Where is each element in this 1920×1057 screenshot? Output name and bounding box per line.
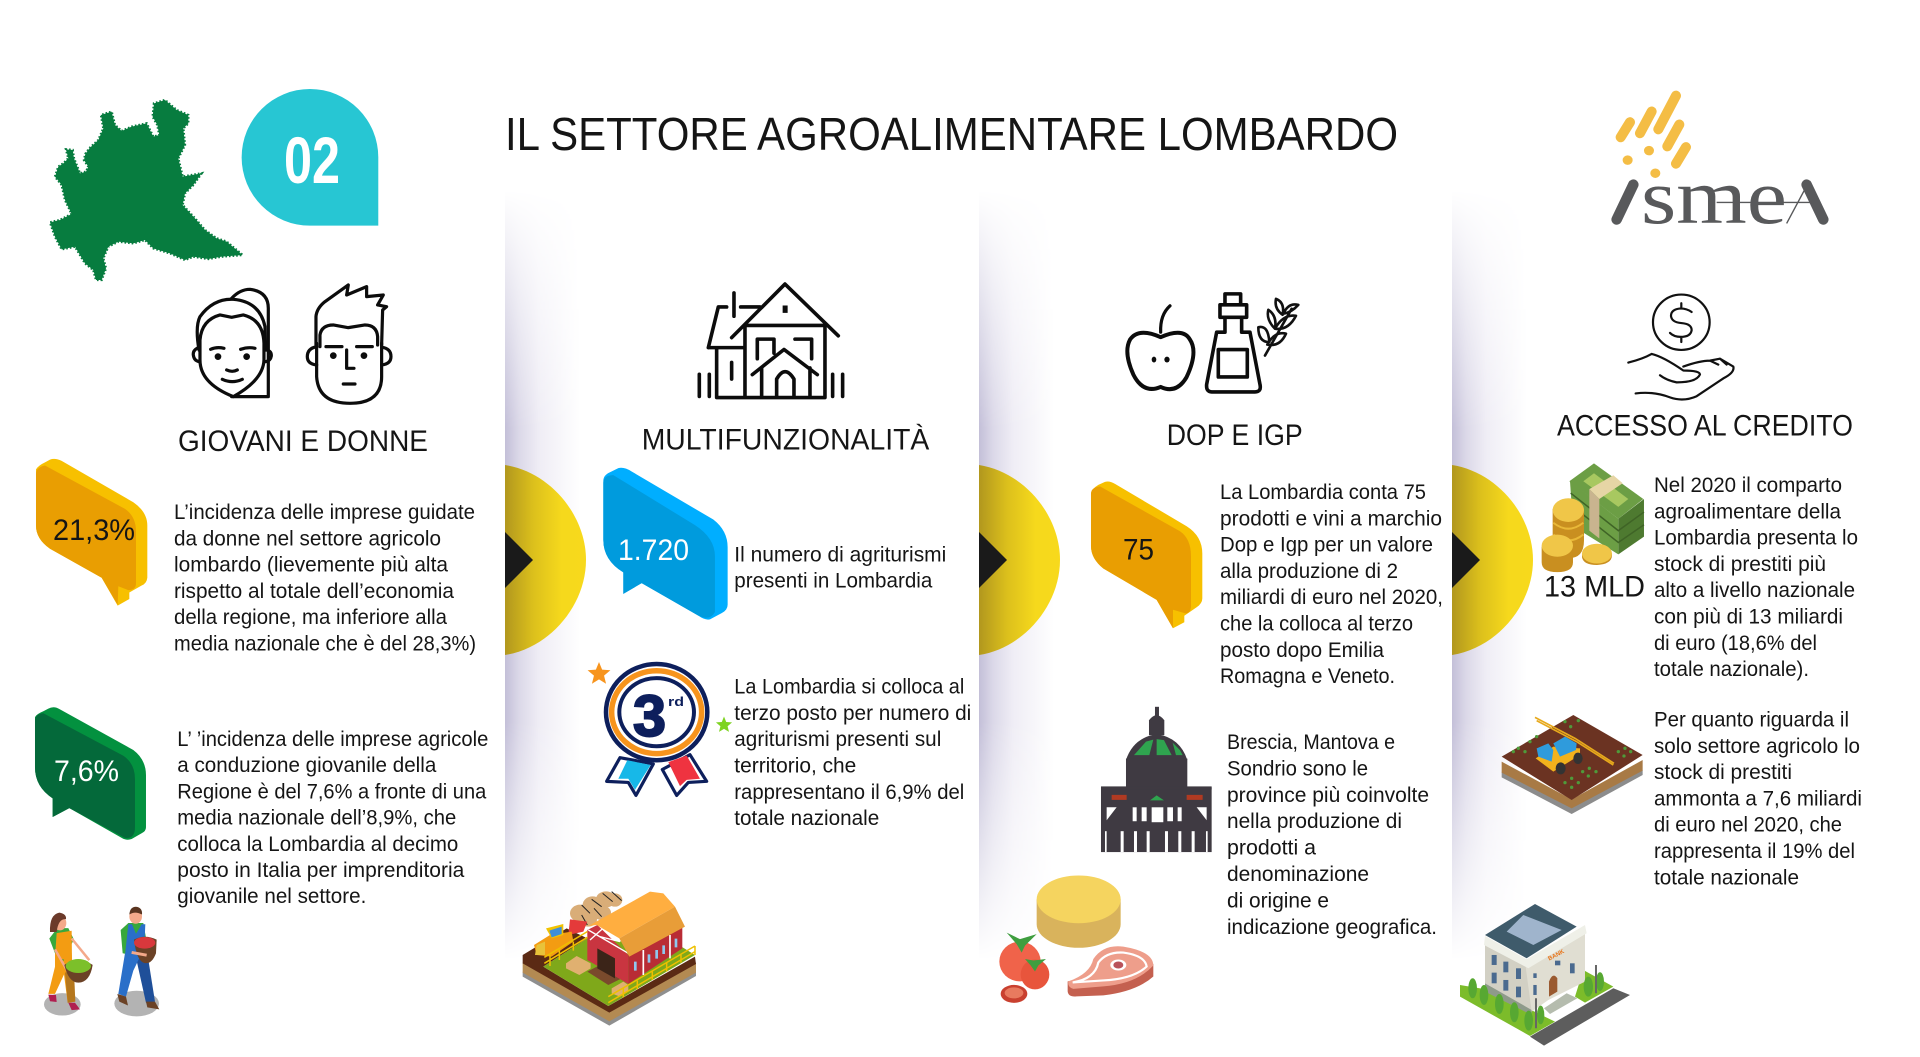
map: Lombardia — [50, 100, 243, 280]
illustration: isometric farm — [523, 891, 696, 1026]
text: province: Sondrio sono le — [1227, 757, 1368, 780]
text: province: prodotti a — [1227, 837, 1316, 860]
text: stock prestiti: stock di prestiti più — [1654, 553, 1826, 576]
callout: 7,6%: 7,6% — [54, 755, 119, 788]
text: terzo posto: territorio, che — [734, 754, 856, 778]
icon: woman and man faces — [193, 285, 391, 403]
text: numero agriturismi — [734, 544, 946, 593]
panel: giovani e donne — [35, 285, 488, 1016]
arrow: column 1 to 2 — [505, 465, 586, 655]
text: terzo posto: La Lombardia si colloca al — [734, 676, 964, 699]
callout: 21,3% — [36, 459, 147, 606]
text: province: indicazione geografica. — [1227, 916, 1437, 939]
text: settore agricolo: Per quanto riguarda il — [1654, 709, 1849, 732]
text: incidenza giovani: media nazionale dell’8,9%, che — [177, 807, 456, 830]
text: province: di origine e — [1227, 889, 1329, 912]
text: incidenza donne: da donne nel settore agricolo — [174, 527, 441, 550]
text: prodotti e vini — [1220, 481, 1443, 688]
icon: apple, bottle and wheat — [1127, 294, 1298, 392]
text: settore agricolo: stock di prestiti — [1654, 761, 1792, 784]
text: settore agricolo: ammonta a 7,6 miliardi — [1654, 788, 1862, 810]
arrow: column 3 to 4 — [1452, 465, 1533, 655]
callout: 1.720: 1.720 — [618, 534, 689, 567]
text: incidenza giovani: a conduzione giovanile della — [177, 754, 437, 777]
text: stock prestiti: con più di 13 miliardi — [1654, 606, 1843, 628]
callout: 7,6% — [35, 707, 146, 840]
text: incidenza donne: L’incidenza delle imprese guidate — [174, 501, 475, 524]
text: settore agricolo — [1654, 709, 1862, 889]
text: province: province più coinvolte — [1227, 784, 1429, 807]
text: settore agricolo: solo settore agricolo lo — [1654, 735, 1860, 758]
text: incidenza donne: media nazionale che è del 28,3%) — [174, 632, 476, 656]
heading: ACCESSO AL CREDITO — [1557, 410, 1853, 443]
text: province — [1227, 731, 1437, 939]
title: IL SETTORE AGROALIMENTARE LOMBARDO — [505, 108, 1398, 160]
icon: hand with coin — [1628, 295, 1734, 400]
text: stock prestiti: alto a livello nazionale — [1654, 579, 1855, 602]
panel: accesso al credito — [1460, 295, 1862, 1046]
text: incidenza giovani: posto in Italia per imprenditoria — [177, 859, 465, 882]
text: province: denominazione — [1227, 863, 1369, 886]
text: prodotti e vini: La Lombardia conta 75 — [1220, 481, 1426, 504]
text: stock prestiti: agroalimentare della — [1654, 500, 1841, 523]
illustration: tractor on field — [1502, 715, 1643, 814]
text: incidenza donne — [174, 501, 476, 656]
text: prodotti e vini: posto dopo Emilia — [1220, 639, 1384, 662]
text: stock prestiti: di euro (18,6% del — [1654, 632, 1817, 655]
text: stock prestiti: Nel 2020 il comparto — [1654, 474, 1842, 497]
text: terzo posto: terzo posto per numero di — [734, 702, 971, 725]
text: prodotti e vini: prodotti e vini a marchio — [1220, 507, 1442, 530]
text: settore agricolo: di euro nel 2020, che — [1654, 814, 1842, 837]
logo: ISMEA — [1617, 96, 1823, 240]
icon: third place medal — [588, 662, 732, 795]
text: incidenza giovani: giovanile nel settore. — [177, 885, 366, 908]
panel: multifunzionalita — [523, 284, 971, 1026]
logo: ISMEA: sme — [1641, 153, 1787, 240]
icon: third place medal: rd — [668, 694, 684, 709]
text: incidenza donne: della regione, ma inferiore alla — [174, 606, 447, 629]
text: province: Brescia, Mantova e — [1227, 731, 1395, 754]
text: stock prestiti — [1654, 474, 1858, 681]
text: incidenza donne: lombardo (lievemente più alta — [174, 554, 448, 577]
text: incidenza giovani: Regione è del 7,6% a fronte di una — [177, 780, 487, 803]
callout: 1.720 — [603, 468, 728, 620]
text: province: nella produzione di — [1227, 810, 1402, 833]
arrow: column 2 to 3 — [979, 465, 1060, 655]
heading: GIOVANI E DONNE — [178, 425, 428, 458]
icon: third place medal: 3 — [633, 684, 666, 749]
callout: 75: 75 — [1123, 534, 1154, 566]
illustration: cathedral — [1101, 707, 1212, 852]
text: prodotti e vini: Romagna e Veneto. — [1220, 665, 1395, 688]
callout: 75 — [1091, 481, 1202, 628]
icon: farmhouse — [699, 284, 843, 398]
text: terzo posto — [734, 676, 971, 830]
text: stock prestiti: totale nazionale). — [1654, 658, 1809, 681]
badge: 02: 02 — [284, 123, 340, 197]
panel: dop e igp — [999, 294, 1443, 1003]
text: prodotti e vini: alla produzione di 2 — [1220, 560, 1398, 583]
illustration: money and coins — [1542, 463, 1644, 572]
heading: DOP E IGP — [1167, 419, 1303, 452]
callout: 21,3%: 21,3% — [53, 514, 135, 547]
text: terzo posto: rappresentano il 6,9% del — [734, 781, 964, 804]
illustration: cheese, tomatoes and meat — [999, 875, 1153, 1003]
callout: 13 MLD: 13 MLD — [1544, 571, 1645, 604]
text: prodotti e vini: miliardi di euro nel 2020, — [1220, 586, 1443, 609]
text: incidenza giovani: L’ ’incidenza delle imprese agricole — [177, 728, 488, 751]
text: terzo posto: agriturismi presenti sul — [734, 728, 941, 751]
illustration: bank building — [1460, 904, 1630, 1046]
text: numero agriturismi: Il numero di agriturismi — [734, 544, 946, 566]
text: settore agricolo: totale nazionale — [1654, 866, 1799, 889]
text: numero agriturismi: presenti in Lombardia — [734, 570, 933, 593]
text: settore agricolo: rappresenta il 19% del — [1654, 840, 1855, 863]
text: incidenza donne: rispetto al totale dell’economia — [174, 580, 454, 603]
text: prodotti e vini: Dop e Igp per un valore — [1220, 534, 1433, 557]
badge: 02 — [242, 89, 378, 226]
text: prodotti e vini: che la colloca al terzo — [1220, 612, 1413, 636]
text: incidenza giovani — [177, 728, 488, 908]
illustration: farmers — [44, 907, 159, 1016]
text: incidenza giovani: colloca la Lombardia al decimo — [177, 833, 458, 856]
text: terzo posto: totale nazionale — [734, 807, 879, 830]
text: stock prestiti: Lombardia presenta lo — [1654, 527, 1858, 550]
illustration: bank building: BANK — [1547, 949, 1566, 962]
heading: MULTIFUNZIONALITÀ — [642, 423, 929, 456]
